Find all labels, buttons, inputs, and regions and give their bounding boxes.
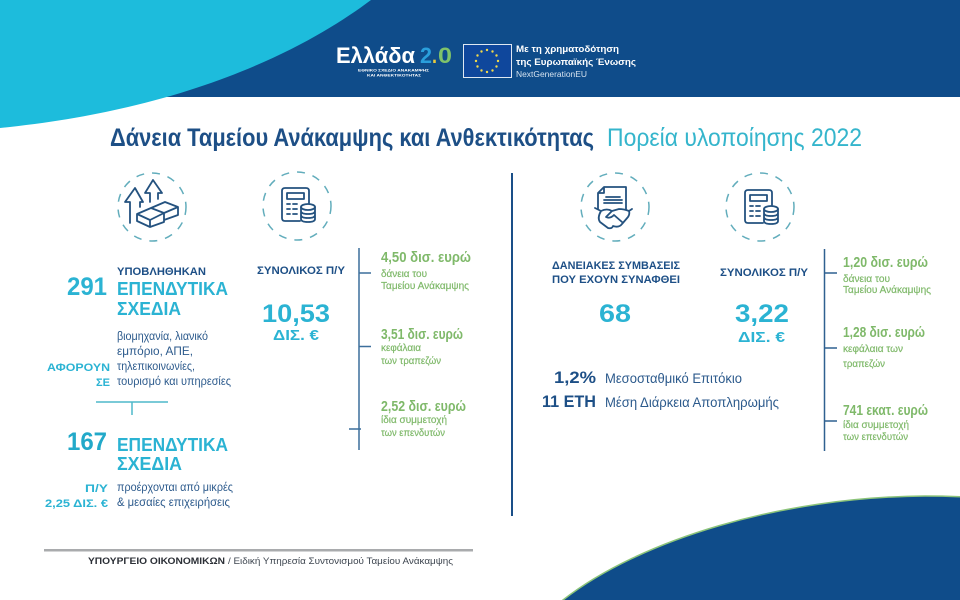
text: sectors (47, 329, 231, 389)
item: 741: των επενδυτών (843, 431, 908, 443)
panel: loan contracts: ΠΟΥ ΕΧΟΥΝ ΣΥΝΑΦΘΕΙ (552, 274, 680, 286)
icon: investment arrows and stacks (118, 173, 186, 241)
logo: Ελλάδα 2.0: Ελλάδα (336, 43, 415, 68)
bottom corner shape (556, 496, 960, 600)
stat: 291 plans: ΥΠΟΒΛΗΘΗΚΑΝ (117, 266, 206, 278)
footer source (44, 549, 473, 567)
central divider (511, 173, 513, 516)
panel: total budget left: 10,53 (262, 300, 330, 328)
item: 741: 741 εκατ. ευρώ (843, 402, 928, 419)
stat: 291 plans: 291 (67, 273, 107, 301)
panel: loan contracts (552, 260, 680, 328)
panel: total budget left: ΣΥΝΟΛΙΚΟΣ Π/Υ (257, 265, 346, 277)
logo: Ελλάδα 2.0 (336, 43, 452, 78)
loan terms: Μεσοσταθμικό Επιτόκιο (605, 370, 742, 386)
item: 2,52 (381, 398, 466, 439)
text: SME budget: 2,25 ΔΙΣ. € (45, 498, 108, 510)
stat: 167 plans (67, 428, 228, 474)
stat: 291 plans: ΣΧΕΔΙΑ (117, 299, 181, 319)
loan terms: Μέση Διάρκεια Αποπληρωμής (605, 394, 779, 410)
logo: Ελλάδα 2.0: 0 (438, 43, 452, 68)
logo: Ελλάδα 2.0: ΕΘΝΙΚΟ ΣΧΕΔΙΟ ΑΝΑΚΑΜΨΗΣ (358, 68, 430, 72)
footer source: ΥΠΟΥΡΓΕΙΟ ΟΙΚΟΝΟΜΙΚΩΝ (88, 556, 225, 567)
title: Δάνεια Ταμείου Ανάκαμψης και Ανθεκτικότητας (110, 124, 594, 152)
item: 1,28: κεφάλαια των (843, 343, 903, 355)
panel: loan contracts: ΔΑΝΕΙΑΚΕΣ ΣΥΜΒΑΣΕΙΣ (552, 260, 680, 272)
text: sectors: τουρισμό και υπηρεσίες (117, 374, 231, 388)
icon: calculator and coins (right) (726, 173, 794, 241)
item: 4,50: δάνεια του (381, 268, 427, 280)
logo: Ελλάδα 2.0: . (432, 43, 437, 68)
footer source: / Ειδική Υπηρεσία Συντονισμού Ταμείου Ανάκαμψης (228, 556, 453, 567)
text: sectors: εμπόριο, ΑΠΕ, (117, 344, 193, 358)
item: 3,51: 3,51 δισ. ευρώ (381, 326, 463, 343)
logo: Ελλάδα 2.0: 2 (420, 43, 432, 68)
item: 1,28: τραπεζών (843, 358, 885, 370)
icon: EU flag (464, 44, 512, 78)
item: 4,50: 4,50 δισ. ευρώ (381, 249, 471, 266)
cyan corner shape (0, 0, 371, 128)
breakdown list left (381, 249, 471, 439)
panel: total budget left: ΔΙΣ. € (273, 327, 320, 344)
stat: 167 plans: ΕΠΕΝΔΥΤΙΚΑ (117, 435, 228, 455)
budget bracket right (824, 249, 837, 451)
text: SME budget: προέρχονται από μικρές (117, 480, 233, 494)
breakdown list right (843, 254, 931, 443)
text: SME budget (45, 480, 233, 510)
item: 4,50 (381, 249, 471, 292)
item: 2,52: των επενδυτών (381, 427, 445, 439)
logo: Ελλάδα 2.0: ΚΑΙ ΑΝΘΕΚΤΙΚΟΤΗΤΑΣ (367, 72, 422, 78)
title: Πορεία υλοποίησης 2022 (607, 124, 862, 152)
panel: total budget right: 3,22 (735, 300, 789, 328)
loan terms: 1,2% (554, 368, 596, 387)
header band (0, 0, 960, 97)
EU funding statement: της Ευρωπαϊκής Ένωσης (516, 57, 636, 68)
item: 3,51: των τραπεζών (381, 355, 441, 367)
item: 2,52: 2,52 δισ. ευρώ (381, 398, 466, 415)
EU funding statement (516, 44, 636, 79)
panel: loan contracts: 68 (599, 300, 631, 328)
loan terms: 11 ΕΤΗ (542, 392, 596, 411)
item: 741 (843, 402, 928, 443)
item: 1,20 (843, 254, 931, 296)
item: 4,50: Ταμείου Ανάκαμψης (381, 280, 469, 292)
text: sectors: τηλεπικοινωνίες, (117, 359, 195, 373)
budget bracket left (349, 248, 371, 450)
item: 741: ίδια συμμετοχή (843, 419, 909, 431)
item: 1,28: 1,28 δισ. ευρώ (843, 324, 925, 341)
panel: total budget right: ΣΥΝΟΛΙΚΟΣ Π/Υ (720, 267, 809, 279)
EU funding statement: Με τη χρηματοδότηση (516, 44, 619, 55)
item: 3,51 (381, 326, 463, 367)
stat: 291 plans (67, 266, 228, 319)
item: 1,28 (843, 324, 925, 370)
item: 1,20: 1,20 δισ. ευρώ (843, 254, 928, 271)
item: 3,51: κεφάλαια (381, 342, 421, 354)
panel: total budget left (257, 265, 346, 344)
icon: contract and handshake (581, 173, 649, 241)
stat: 167 plans: ΣΧΕΔΙΑ (117, 454, 182, 474)
panel: submitted plans (45, 266, 233, 510)
icon: calculator and coins (left) (263, 172, 331, 240)
loan terms (542, 368, 779, 411)
stat: 167 plans: 167 (67, 428, 107, 456)
text: sectors: βιομηχανία, λιανικό (117, 329, 208, 343)
panel: total budget right: ΔΙΣ. € (738, 329, 786, 346)
EU funding statement: NextGenerationEU (516, 70, 587, 79)
stat: 291 plans: ΕΠΕΝΔΥΤΙΚΑ (117, 279, 228, 299)
item: 1,20: δάνεια του (843, 273, 890, 285)
text: sectors: ΑΦΟΡΟΥΝ (47, 362, 110, 374)
item: 1,20: Ταμείου Ανάκαμψης (843, 284, 931, 296)
panel: total budget right (720, 267, 809, 346)
text: SME budget: Π/Υ (85, 483, 109, 495)
text: SME budget: & μεσαίες επιχειρήσεις (117, 495, 230, 509)
text: sectors: ΣΕ (96, 377, 110, 389)
item: 2,52: ίδια συμμετοχή (381, 414, 447, 426)
